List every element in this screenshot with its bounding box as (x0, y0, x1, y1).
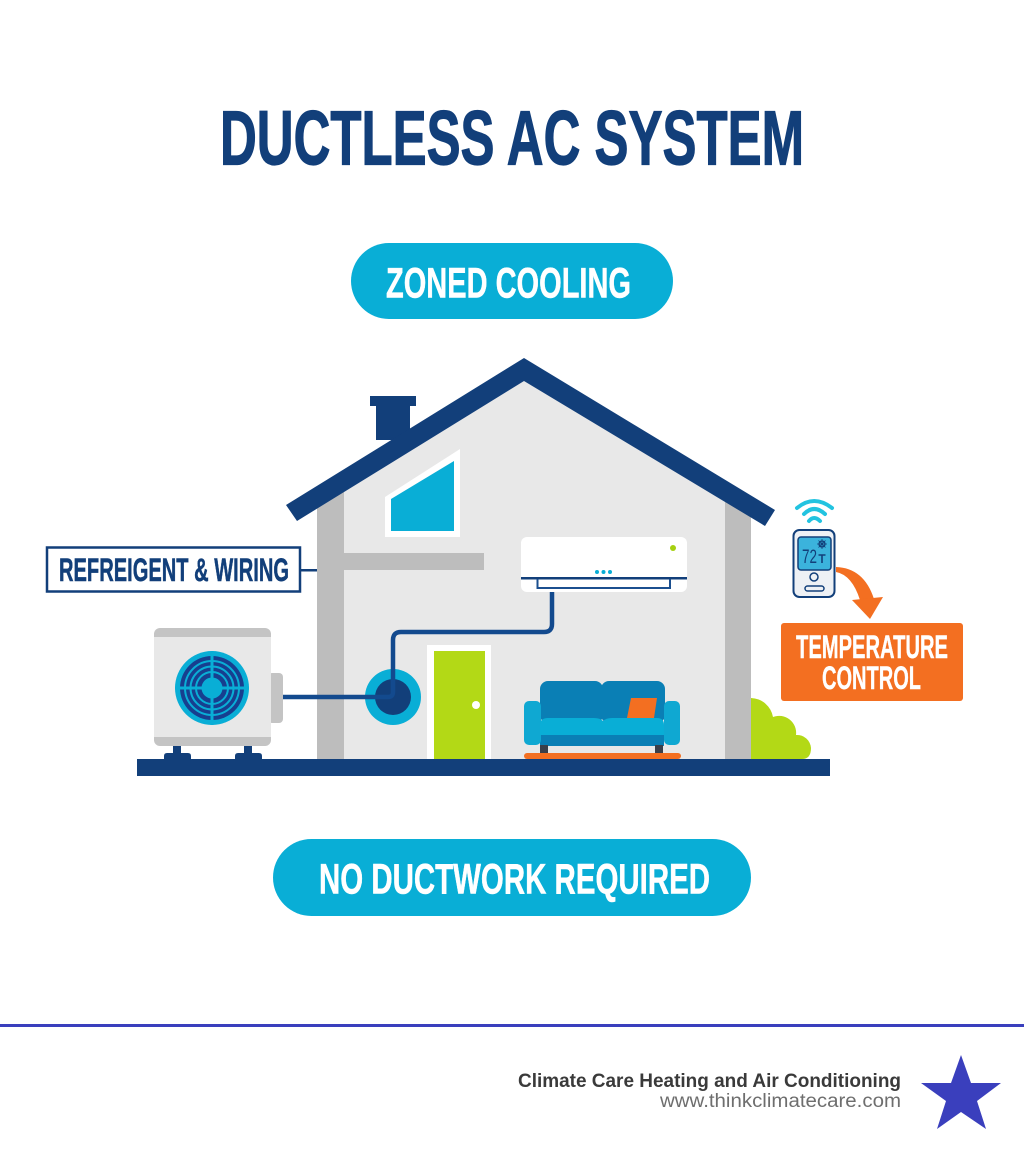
callout: temperature control (781, 623, 963, 701)
rug (524, 753, 681, 759)
feet (164, 746, 262, 759)
footer text: Climate Care Heating and Air Conditioning (518, 1071, 901, 1092)
outdoor condenser unit (154, 628, 283, 759)
side box (268, 673, 283, 723)
footer text (518, 1071, 901, 1112)
left wall column (317, 482, 344, 759)
label: refrigerant and wiring (47, 548, 317, 592)
right wall column (725, 490, 751, 759)
ground line (137, 759, 830, 776)
icon: wifi signal (797, 501, 832, 521)
label: refrigerant and wiring: REFREIGENT & WIRING (59, 552, 289, 588)
chimney (370, 396, 416, 440)
house (283, 358, 811, 759)
pill: no ductwork required: NO DUCTWORK REQUIRED (319, 856, 710, 904)
arrow: thermostat to temperature control (836, 567, 883, 619)
icon: star logo (921, 1055, 1001, 1129)
icon: thermostat (794, 530, 834, 597)
interior beam (344, 553, 484, 570)
footer text: www.thinkclimatecare.com (659, 1091, 901, 1112)
callout: temperature control: CONTROL (822, 660, 921, 696)
sofa (524, 681, 680, 754)
door (427, 645, 491, 759)
wall connection port (365, 669, 421, 725)
pill: zoned cooling: ZONED COOLING (386, 260, 631, 308)
fan (175, 651, 249, 725)
pill: zoned cooling (351, 243, 673, 319)
refrigerant line (283, 592, 552, 697)
house wall (317, 372, 751, 759)
roof (286, 358, 775, 526)
indoor AC unit (521, 537, 687, 592)
attic window (385, 449, 460, 537)
pill: no ductwork required (273, 839, 751, 916)
bush (751, 698, 811, 759)
footer divider (0, 1024, 1024, 1027)
cabinet (154, 628, 271, 746)
icon: thermostat: 72 (802, 547, 817, 568)
